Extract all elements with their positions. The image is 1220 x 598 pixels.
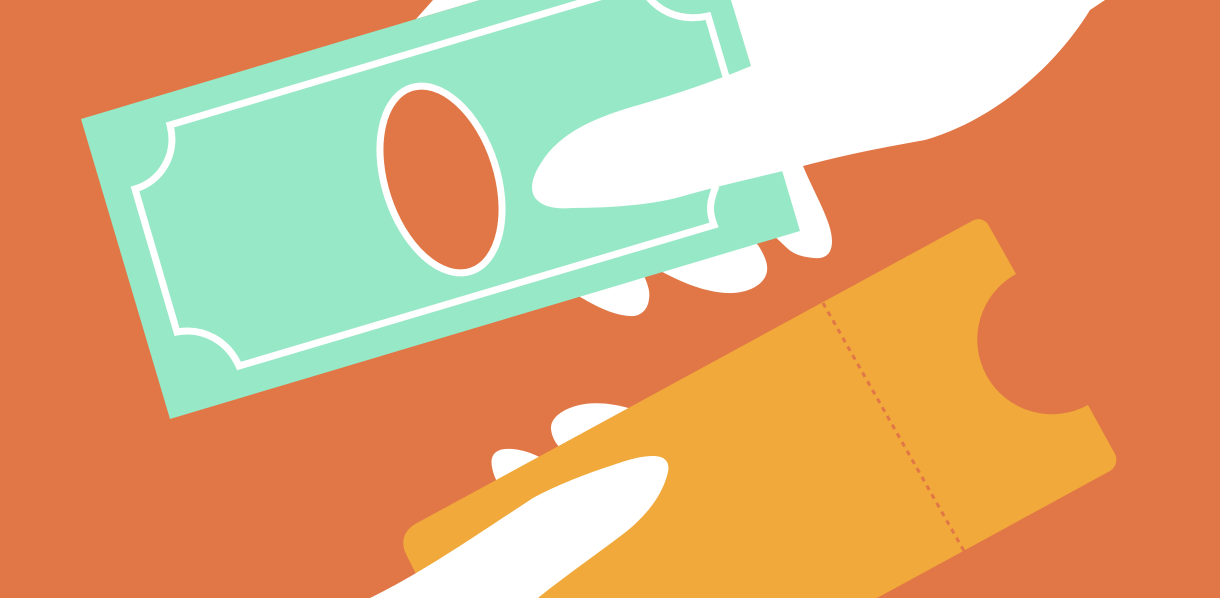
ticket tear line bbox=[823, 303, 964, 551]
ticket bbox=[403, 219, 1116, 598]
banknote body bbox=[81, 0, 800, 419]
lower hand: fingers behind ticket bbox=[492, 403, 640, 484]
banknote centre oval bbox=[358, 70, 524, 289]
banknote bbox=[81, 0, 800, 419]
banknote inner border with scalloped corners bbox=[135, 0, 727, 366]
upper hand: pointing finger and palm over banknote bbox=[532, 0, 1105, 208]
lower hand: finger over ticket bbox=[370, 456, 668, 598]
upper hand: fingers behind banknote bbox=[416, 0, 832, 316]
